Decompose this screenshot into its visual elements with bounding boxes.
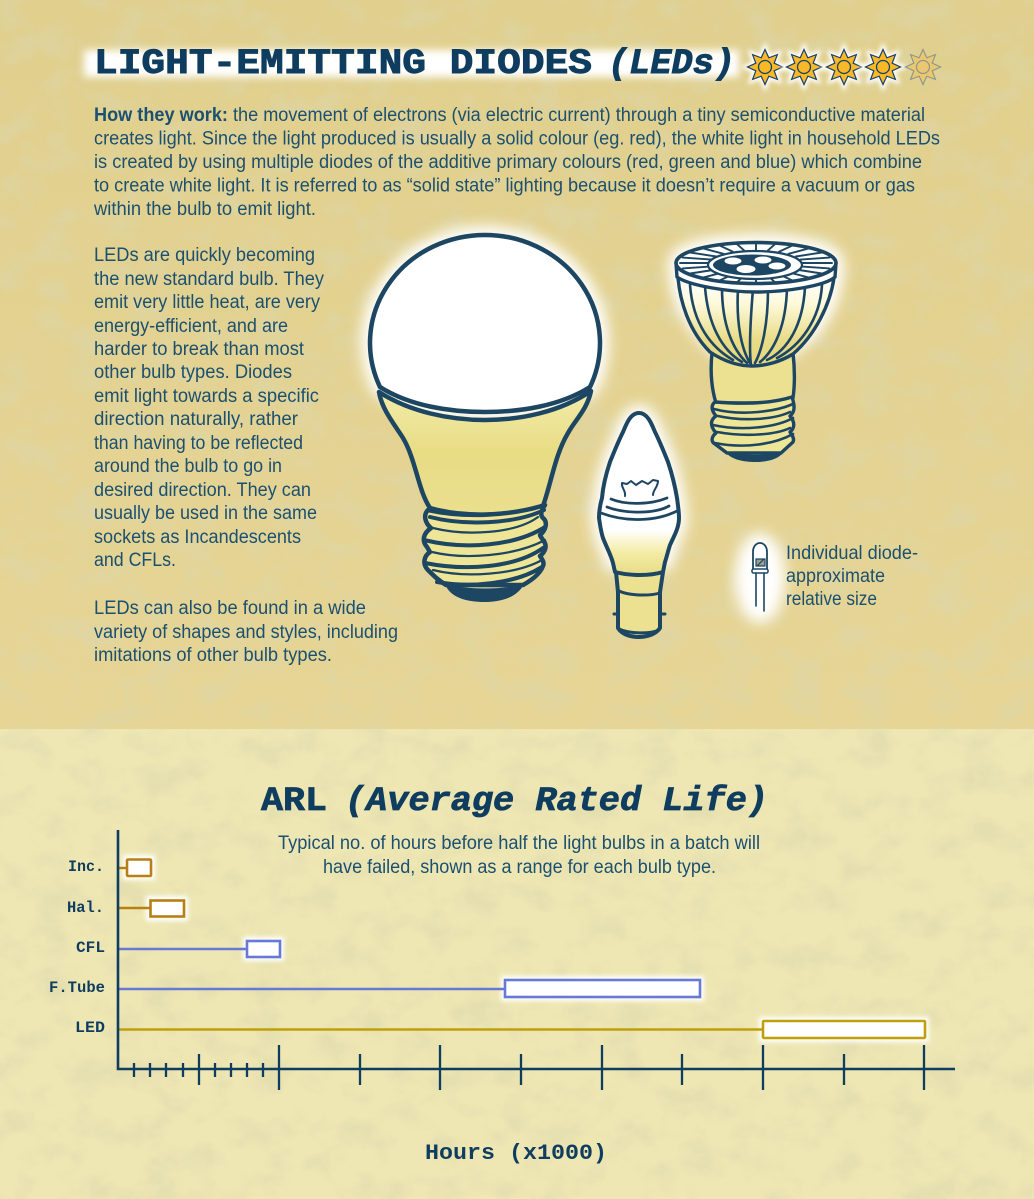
text block: ARL description [278, 833, 760, 878]
chart: ARL range chart [49, 830, 955, 1090]
y axis labels: CFL [76, 939, 105, 957]
diode body [753, 543, 767, 570]
text block: how they work [93, 105, 940, 220]
reflector threads [713, 404, 793, 446]
text block: ARL description: Typical no. of hours before half the light bulbs in a batch will [278, 833, 760, 854]
diode flange [752, 569, 768, 573]
text block: LEDs description: the new standard bulb. They [94, 269, 324, 290]
text block: LEDs description: sockets as Incandescents [94, 527, 301, 548]
bar: Fluorescent tube [119, 980, 700, 997]
reflector cap [725, 451, 784, 462]
y axis labels: Inc. [68, 858, 104, 876]
bar: Halogen [119, 900, 184, 917]
candle base line [619, 591, 660, 633]
panel: background top [0, 0, 1034, 729]
illustration: large globe LED bulb [370, 235, 600, 602]
bulb cap [445, 584, 524, 602]
title: (LEDs) [608, 44, 735, 84]
title [84, 44, 739, 84]
candle cylinder base [616, 572, 663, 637]
title: LIGHT-EMITTING DIODES [94, 44, 592, 84]
globe [370, 235, 600, 412]
diode legs [756, 573, 764, 611]
text block: LEDs description: usually be used in the same [94, 503, 317, 524]
reflector diode cluster [713, 254, 791, 276]
illustration: candle LED bulb [599, 413, 679, 637]
reflector ribs [690, 285, 822, 365]
text block: how they work: within the bulb to emit light. [93, 199, 316, 220]
text block: how they work: How they work: the movement of electrons (via electric current) through a tiny semiconductive material [94, 105, 925, 126]
text block: shapes and styles: imitations of other bulb types. [94, 645, 332, 666]
diode caption: Individual diode- [786, 543, 918, 564]
text block: shapes and styles [94, 598, 398, 666]
text block: LEDs description: other bulb types. Diodes [94, 362, 292, 383]
diode caption: approximate [786, 566, 885, 587]
y axis labels: F.Tube [49, 979, 105, 997]
text block: LEDs description: than having to be reflected [94, 433, 303, 454]
illustration: individual diode with caption [738, 536, 918, 620]
text block: LEDs description: direction naturally, rather [94, 409, 299, 430]
reflector dome [678, 278, 834, 366]
text block: how they work: to create white light. It is referred to as “solid state” lighting because it doesn’t require a vacuum or gas [94, 176, 915, 196]
bar: LED [119, 1021, 925, 1038]
text block: LEDs description: around the bulb to go in [94, 456, 282, 477]
reflector neck [711, 353, 794, 403]
x axis ticks [134, 1045, 924, 1090]
text block: LEDs description: desired direction. They can [94, 480, 311, 501]
text block: LEDs description [94, 245, 324, 571]
y axis labels: Hal. [67, 899, 104, 917]
diode caption [786, 543, 918, 610]
text block: LEDs description: and CFLs. [94, 550, 176, 571]
candle glass [599, 413, 679, 575]
axes [118, 830, 955, 1069]
text block: LEDs description: emit light towards a specific [94, 386, 319, 407]
candle collar arcs [601, 498, 677, 520]
diode chip [756, 559, 765, 566]
text block: LEDs description: energy-efficient, and are [94, 316, 288, 337]
panel: background bottom [0, 729, 1034, 1199]
reflector rim lower edge [676, 263, 836, 292]
illustration: reflector LED bulb [676, 242, 836, 462]
icon: five-sun rating [748, 50, 940, 84]
reflector radial fins [680, 243, 832, 283]
bulb neck [379, 391, 591, 515]
screw threads [424, 510, 545, 585]
text block: shapes and styles: variety of shapes and styles, including [94, 622, 398, 643]
reflector top face [676, 242, 836, 284]
diode caption: relative size [786, 589, 877, 610]
bar: CFL [119, 941, 280, 957]
text block: LEDs description: LEDs are quickly becoming [94, 245, 315, 266]
text block: how they work: is created by using multiple diodes of the additive primary colours (red, green and blue) which combine [94, 152, 922, 173]
heading: ARL: (Average Rated Life) [345, 783, 768, 821]
reflector screw base [712, 397, 794, 453]
axis title: Hours (x1000) [425, 1141, 607, 1166]
text block: LEDs description: emit very little heat, are very [94, 292, 320, 313]
candle pins [614, 612, 665, 616]
bar: Incandescent [119, 859, 151, 876]
y axis labels: LED [75, 1019, 105, 1037]
candle filament [622, 480, 658, 496]
text block: LEDs description: harder to break than most [94, 339, 305, 360]
y axis labels [49, 858, 105, 1037]
heading: ARL: ARL [261, 783, 327, 821]
screw base [424, 505, 546, 585]
text block: how they work: creates light. Since the light produced is usually a solid colour (eg. red), the white light in household LEDs [94, 128, 940, 150]
reflector inner ring [708, 251, 802, 279]
text block: shapes and styles: LEDs can also be found in a wide [94, 598, 366, 619]
text block: ARL description: have failed, shown as a range for each bulb type. [323, 857, 716, 878]
